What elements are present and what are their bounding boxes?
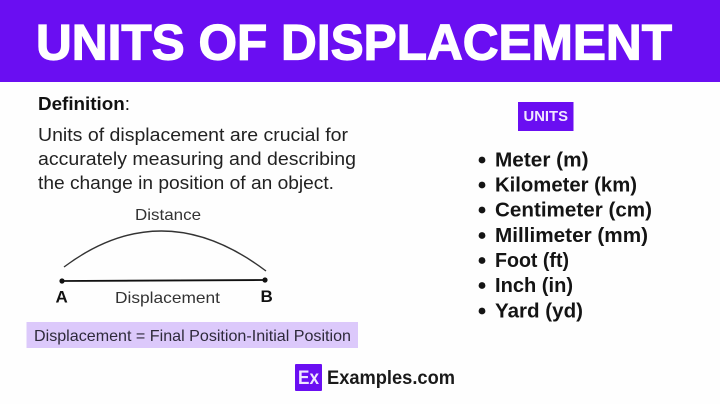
label: B: B	[260, 287, 273, 306]
item: kilometer: Kilometer (km)	[495, 174, 637, 196]
label: distance: Distance	[135, 207, 201, 224]
item: yard: Yard (yd)	[495, 300, 583, 322]
point A dot	[59, 278, 65, 284]
units badge	[518, 102, 574, 131]
label: A: A	[56, 288, 68, 306]
line: displacement path	[62, 280, 265, 281]
point B dot	[262, 277, 268, 283]
arc: distance path	[64, 231, 266, 271]
units badge: UNITS	[524, 108, 568, 125]
formula box: Displacement = Final Position-Initial Position	[34, 328, 351, 345]
label: displacement: Displacement	[115, 290, 221, 307]
definition text: accurately measuring and describing	[38, 148, 356, 169]
wordmark: Examples.com	[327, 368, 455, 389]
icon: Ex badge: Ex	[298, 368, 319, 389]
definition text: Units of displacement are crucial for	[38, 124, 348, 145]
item: centimeter: Centimeter (cm)	[495, 200, 652, 222]
item: millimeter: Millimeter (mm)	[495, 225, 648, 247]
units list	[479, 150, 652, 322]
distance vs displacement diagram	[56, 207, 273, 307]
logo	[295, 364, 455, 391]
item: inch: Inch (in)	[495, 275, 573, 297]
definition text: the change in position of an object.	[38, 172, 334, 193]
formula box	[26, 322, 358, 348]
title: UNITS OF DISPLACEMENT	[36, 14, 672, 70]
header banner	[0, 0, 720, 82]
definition text	[38, 124, 356, 193]
item: foot: Foot (ft)	[495, 250, 569, 272]
definition heading: Definition:	[38, 94, 130, 114]
icon: Ex badge	[295, 364, 322, 391]
item: meter: Meter (m)	[495, 150, 588, 172]
